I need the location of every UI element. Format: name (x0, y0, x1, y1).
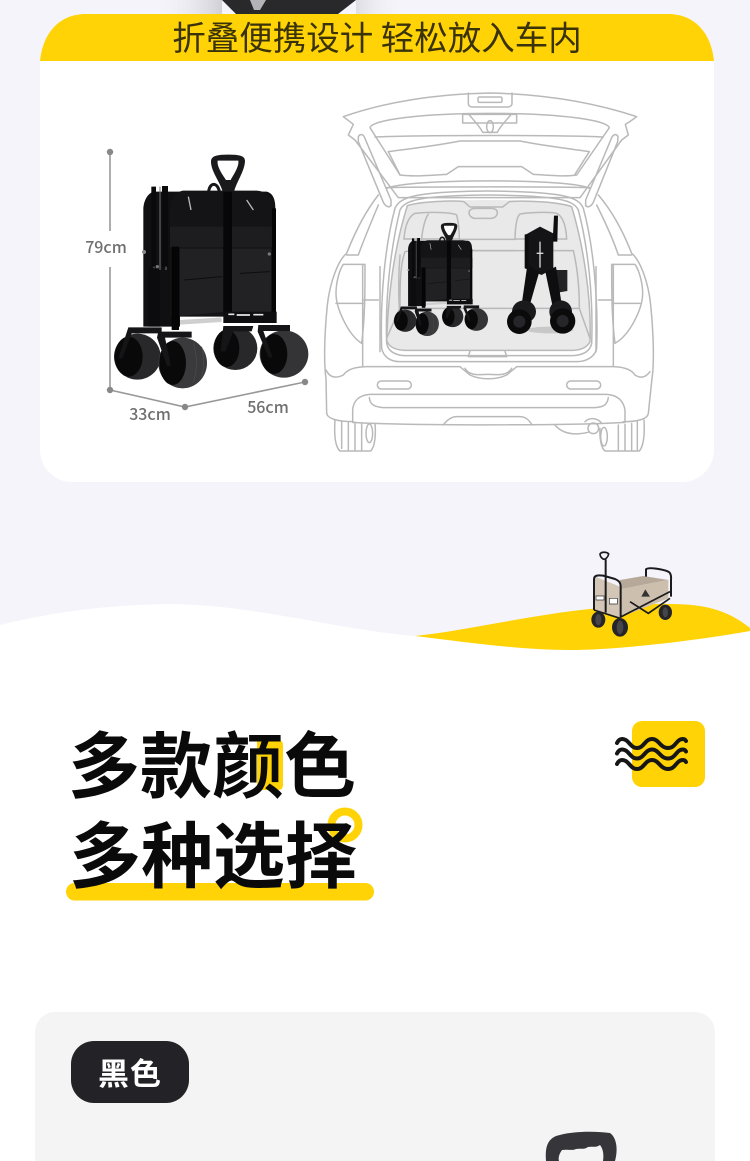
label: width: 56cm (247, 394, 289, 418)
badge text: 黑色 (98, 1049, 162, 1094)
mini wagon illustration (591, 552, 672, 637)
title line 2: 多种选择 (69, 798, 357, 903)
accent block behind 颜 (257, 740, 283, 790)
background: lavender upper area (0, 0, 750, 680)
panel: black colour option (35, 1012, 715, 1161)
label: depth: 33cm (129, 401, 171, 425)
yellow wave (415, 604, 750, 650)
photo: wagon in trunk, side view (507, 216, 575, 334)
white wave section (0, 604, 750, 1161)
accent underline (66, 883, 374, 900)
title line 1: 多款颜色 (68, 708, 356, 813)
heading text: 折叠便携设计 轻松放入车内 (172, 11, 582, 60)
photo: folded wagon (114, 155, 308, 388)
illustration: car with open tailgate (325, 93, 653, 451)
badge: black (71, 1041, 189, 1103)
label: height: 79cm (85, 234, 127, 258)
wagon handle top (546, 1132, 617, 1161)
photo: wagon in trunk, front view (394, 223, 488, 336)
trunk interior (387, 200, 590, 350)
photo fragment: wagon above header (150, 0, 406, 14)
icon: waves on yellow square (617, 721, 705, 787)
panel body (40, 60, 714, 482)
panel: folding design (40, 11, 714, 482)
accent ring (332, 812, 358, 838)
heading band (40, 14, 714, 61)
dimension lines (107, 149, 308, 410)
title block (66, 708, 374, 903)
